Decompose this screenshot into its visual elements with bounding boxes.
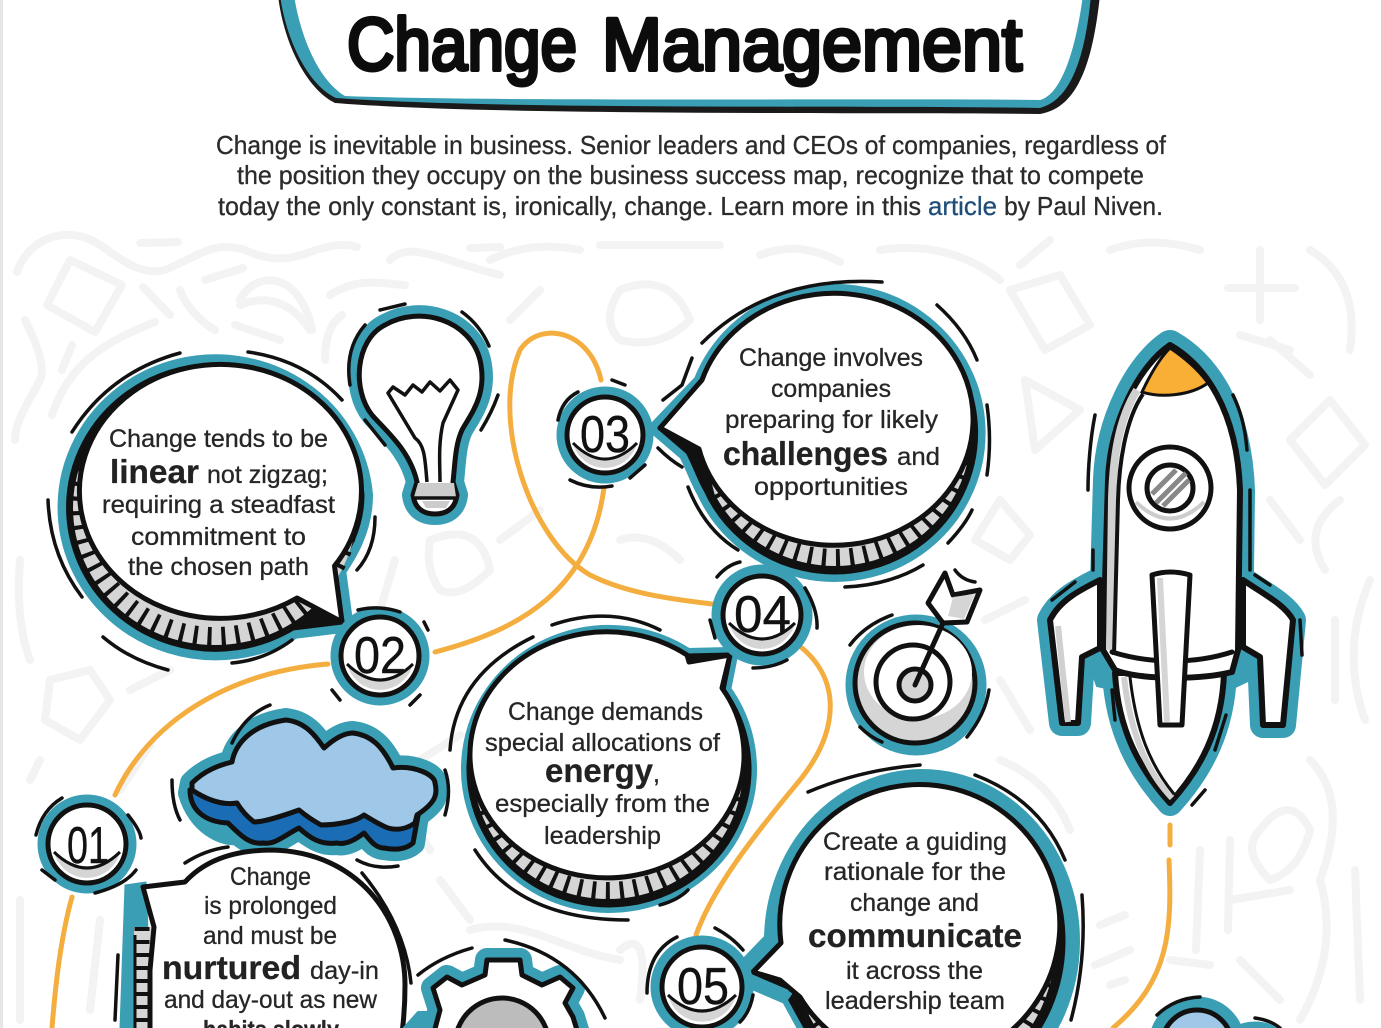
badge 01 xyxy=(36,795,141,893)
badge 04: 04 xyxy=(734,586,791,644)
text: linear: Change tends to be xyxy=(109,425,328,453)
badge 02 xyxy=(331,607,429,705)
text: challenges: preparing for likely xyxy=(725,406,939,434)
icon: target with arrow xyxy=(846,570,989,755)
panel: bubble 05 communicate xyxy=(753,765,1083,1028)
text: energy: leadership xyxy=(544,822,661,850)
text: linear: commitment to xyxy=(131,523,306,551)
text: communicate xyxy=(808,828,1022,1015)
text: linear xyxy=(102,425,335,581)
intro paragraph: the position they occupy on the business success map, recognize that to compete xyxy=(237,160,1144,190)
text: challenges: companies xyxy=(771,375,891,403)
intro paragraph: article xyxy=(928,191,997,221)
intro paragraph: today the only constant is, ironically, change. Learn more in this xyxy=(218,191,921,221)
text: energy: energy xyxy=(545,752,654,789)
title xyxy=(347,3,1022,86)
text: challenges: Change involves xyxy=(739,344,923,372)
icon: gear xyxy=(402,940,605,1028)
panel: bubble 04 energy xyxy=(450,616,749,920)
text: communicate: communicate xyxy=(808,917,1022,954)
text: nurtured: is prolonged xyxy=(204,892,337,920)
title: Change xyxy=(347,3,577,86)
badge 05 xyxy=(647,928,753,1028)
text: nurtured: and must be xyxy=(203,922,337,950)
intro paragraph: Change is inevitable in business. Senior leaders and CEOs of companies, regardless of xyxy=(216,130,1167,160)
badge 04 xyxy=(710,562,817,668)
text: challenges: challenges xyxy=(723,435,888,472)
text: nurtured xyxy=(162,863,379,1028)
text: linear: not zigzag; xyxy=(207,461,328,489)
panel: bubble 03 challenges xyxy=(658,281,990,587)
text: communicate: it across the xyxy=(846,957,983,985)
background doodle pattern xyxy=(15,235,1370,1020)
title banner xyxy=(278,0,1100,114)
text: energy: Change demands xyxy=(508,698,703,726)
text: nurtured: day-in xyxy=(310,957,379,985)
intro paragraph: by Paul Niven. xyxy=(1004,191,1163,221)
panel: bubble 02 linear xyxy=(48,352,375,670)
text: communicate: leadership team xyxy=(825,987,1005,1015)
text: nurtured: Change xyxy=(230,863,311,891)
icon: rocket xyxy=(1050,345,1302,805)
text: challenges xyxy=(723,344,940,501)
text: energy xyxy=(485,698,720,850)
text: challenges: and xyxy=(897,443,940,471)
text: communicate: change and xyxy=(850,889,979,917)
text: nurtured: and day-out as new xyxy=(164,986,378,1014)
text: nurtured: nurtured xyxy=(162,949,301,986)
badge 05: 05 xyxy=(677,958,729,1016)
badge 01: 01 xyxy=(67,817,109,875)
text: linear: requiring a steadfast xyxy=(102,491,335,519)
badge 03: 03 xyxy=(580,406,630,464)
title: Management xyxy=(602,3,1022,86)
text: challenges: opportunities xyxy=(754,473,908,501)
badge 02: 02 xyxy=(354,627,406,685)
icon: light bulb xyxy=(349,304,498,514)
text: energy: especially from the xyxy=(495,790,710,818)
panel: bubble 01 nurtured xyxy=(115,847,411,1028)
connecting route lines xyxy=(52,333,1170,1028)
text: energy: special allocations of xyxy=(485,729,720,757)
icon: cloud xyxy=(172,705,448,867)
text: linear: linear xyxy=(110,453,199,490)
intro paragraph xyxy=(216,130,1167,221)
text: linear: the chosen path xyxy=(128,553,309,581)
text: communicate: Create a guiding xyxy=(823,828,1007,856)
text: energy: , xyxy=(653,760,660,788)
icon: partial cloud bottom right xyxy=(1149,997,1285,1028)
badge 03 xyxy=(557,380,653,487)
text: communicate: rationale for the xyxy=(824,858,1006,886)
